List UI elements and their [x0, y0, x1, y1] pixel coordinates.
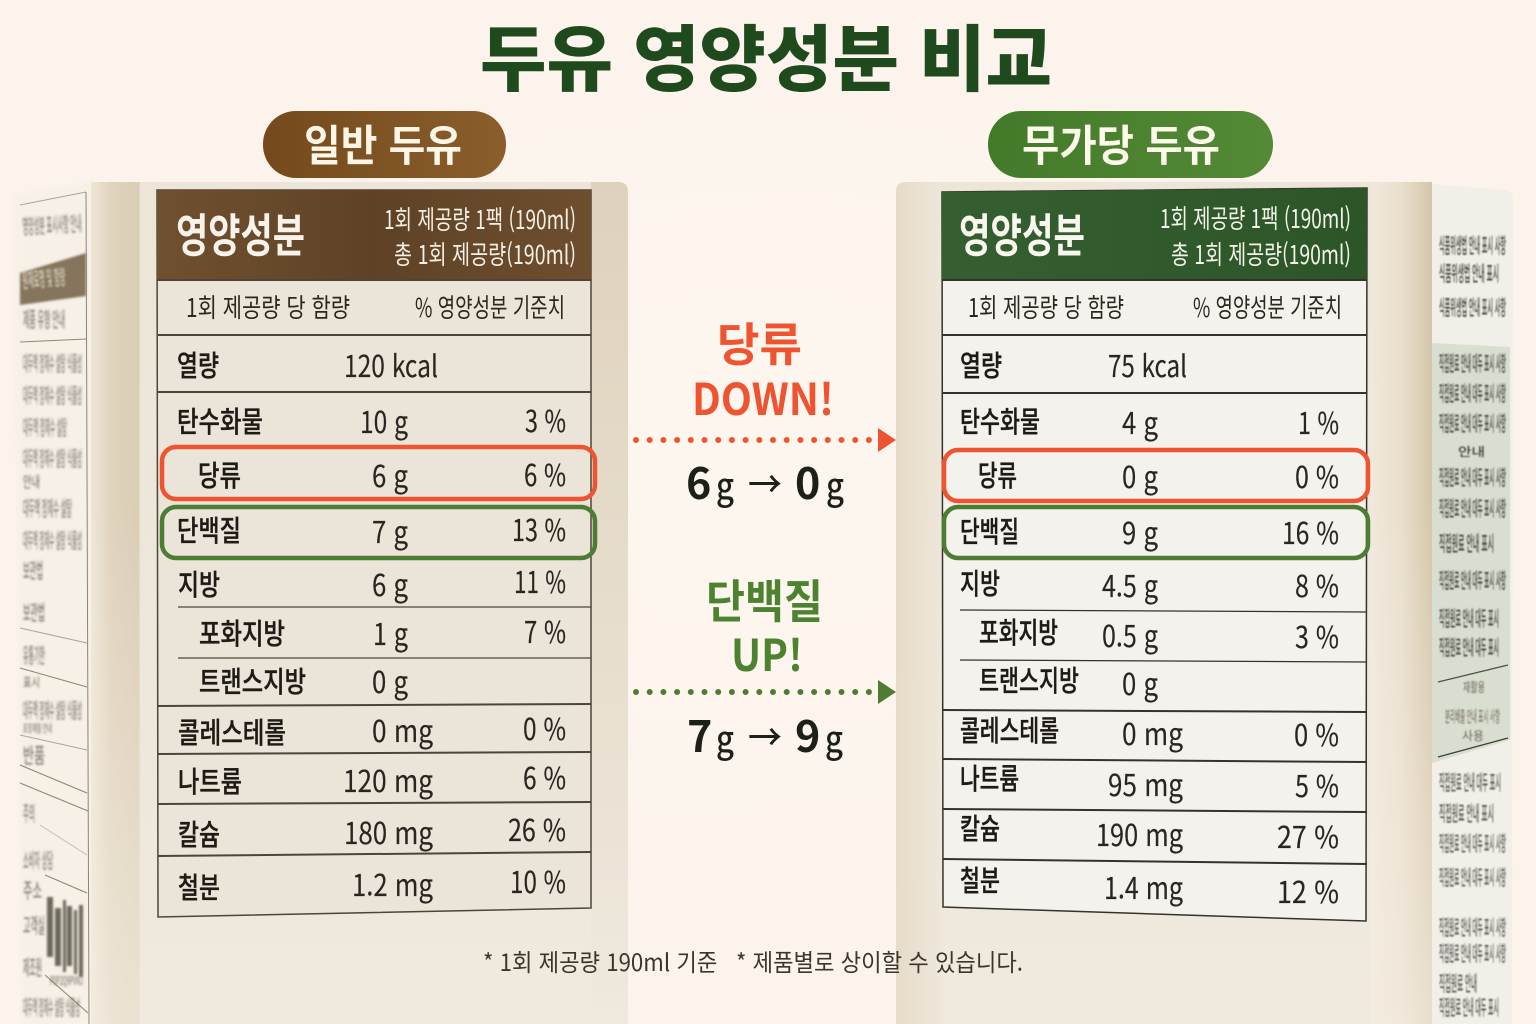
sugar change values: g — [716, 458, 734, 510]
protein change values: g — [716, 711, 734, 763]
row: calories: 열량 — [177, 343, 219, 385]
left carton side panel: 고객실 — [23, 910, 45, 940]
table column headings — [968, 288, 1342, 325]
row: saturated fat: 0.5 g — [1102, 612, 1158, 656]
row: cholesterol: 0 % — [523, 705, 566, 749]
title: 두유 영양성분 비교 — [480, 1, 1052, 106]
row: sodium: 120 mg — [343, 757, 433, 801]
protein change values: 7 — [687, 703, 712, 765]
table header — [942, 188, 1367, 280]
table column headings: 1회 제공량 당 함량 — [968, 288, 1124, 325]
table column headings — [186, 288, 565, 325]
panel: unsweetened soy milk nutrition table — [942, 188, 1368, 921]
row: carbohydrate: 10 g — [360, 398, 408, 442]
right carton side panel — [1432, 184, 1513, 1024]
row: fat — [960, 561, 1339, 606]
badge: unsweetened soy milk — [988, 111, 1273, 178]
row: carbohydrate: 탄수화물 — [177, 399, 263, 441]
row: saturated fat — [979, 610, 1339, 657]
row: carbohydrate — [960, 399, 1339, 443]
table header: 영양성분 — [959, 200, 1085, 266]
row: sugars: 6 g — [372, 452, 408, 496]
left carton side panel: 유통기한 — [23, 640, 45, 670]
row: iron: 12 % — [1277, 868, 1339, 912]
row: calories — [960, 342, 1187, 386]
row: cholesterol — [178, 705, 566, 752]
row: carbohydrate: 탄수화물 — [960, 399, 1040, 441]
left carton side panel: 소비자 상담 — [23, 845, 53, 875]
callout heading: 단백질 — [706, 566, 823, 632]
protein change values: g — [825, 711, 843, 763]
row: calcium — [178, 806, 566, 854]
sugar change values — [686, 450, 844, 512]
callout heading: UP! — [731, 620, 803, 684]
left milk carton: 대두액 정제수 설탕 식물성 — [23, 992, 80, 1022]
row: protein — [177, 506, 566, 552]
row: sodium: 95 mg — [1108, 761, 1183, 805]
callout heading — [692, 309, 834, 428]
row: carbohydrate: 4 g — [1122, 399, 1158, 443]
row: trans fat: 0 g — [372, 658, 408, 702]
row: protein: 13 % — [512, 506, 566, 550]
table header — [157, 190, 591, 280]
arrow: protein — [636, 680, 896, 704]
right carton side panel: 안내 — [1458, 443, 1485, 460]
row: iron: 1.4 mg — [1104, 864, 1183, 908]
left carton side panel — [14, 182, 92, 1024]
left carton side panel: 포장재질 안내 — [23, 720, 52, 736]
protein change values — [687, 703, 843, 765]
left carton side panel: P0P2Q9PVNJ — [50, 972, 83, 989]
callout: sugar down — [636, 309, 896, 512]
arrow: sugar — [636, 428, 896, 452]
highlight: protein row — [944, 507, 1368, 558]
left milk carton — [14, 182, 628, 1024]
row: sugars: 0 g — [1122, 453, 1158, 497]
left carton side panel: 제조원 — [23, 952, 42, 982]
icon: barcode — [47, 897, 83, 989]
table header: 1회 제공량 1팩 (190ml) — [384, 200, 576, 237]
row: calcium — [960, 806, 1339, 857]
left carton spine — [91, 182, 141, 1024]
footnote: * 1회 제공량 190ml 기준 * 제품별로 상이할 수 있습니다. — [483, 943, 1023, 978]
row: trans fat: 0 g — [1122, 660, 1158, 704]
row: saturated fat: 포화지방 — [199, 611, 285, 653]
badge: unsweetened soy milk: 무가당 두유 — [1022, 112, 1220, 174]
row: sodium: 5 % — [1295, 762, 1339, 806]
row: fat: 6 g — [372, 561, 408, 605]
table column headings: % 영양성분 기준치 — [1193, 288, 1342, 325]
row: sugars: 6 % — [524, 451, 566, 495]
row: trans fat — [979, 658, 1158, 704]
row: sodium: 나트륨 — [960, 756, 1019, 798]
row: sugars: 당류 — [198, 453, 241, 495]
row: fat: 지방 — [960, 561, 1000, 603]
row: carbohydrate: 3 % — [525, 397, 566, 441]
row: protein: 단백질 — [177, 508, 241, 550]
protein change values: → — [748, 709, 782, 761]
badge: regular soy milk: 일반 두유 — [304, 112, 462, 174]
left milk carton: 대두액 정제수 설탕 — [23, 493, 72, 523]
right milk carton — [896, 182, 1513, 1024]
left carton side panel: 제품 유형 안내 — [23, 304, 65, 334]
row: sodium — [960, 756, 1339, 806]
row: carbohydrate: 1 % — [1298, 399, 1339, 443]
table column headings: % 영양성분 기준치 — [415, 288, 565, 325]
row: protein: 16 % — [1282, 509, 1339, 553]
row: calcium: 칼슘 — [178, 812, 220, 854]
row: trans fat: 트랜스지방 — [199, 659, 306, 701]
row: cholesterol: 0 % — [1294, 711, 1339, 755]
row: calcium: 칼슘 — [960, 806, 1000, 848]
row: iron — [960, 858, 1339, 912]
table header: 1회 제공량 1팩 (190ml) — [1160, 199, 1351, 236]
row: sodium — [178, 754, 566, 801]
right carton spine — [1370, 182, 1432, 1024]
table header: 총 1회 제공량(190ml) — [394, 235, 576, 272]
callout heading: DOWN! — [692, 364, 834, 428]
left milk carton: 대두액 정제수 설탕 식물성 — [23, 695, 82, 725]
left milk carton: 원재료명 및 함량 — [21, 261, 66, 295]
left carton side panel: 안내 — [23, 471, 40, 492]
sugar change values: 6 — [686, 450, 711, 512]
row: saturated fat: 1 g — [373, 610, 408, 654]
row: fat: 지방 — [178, 562, 220, 604]
row: iron: 철분 — [960, 858, 1000, 900]
row: cholesterol: 0 mg — [1122, 710, 1183, 754]
panel: regular soy milk nutrition table — [157, 190, 595, 917]
right carton side panel: 사용 — [1462, 727, 1484, 744]
row: protein: 단백질 — [960, 509, 1019, 551]
left carton side panel: 표시 — [23, 672, 40, 691]
sugar change values: → — [748, 456, 782, 508]
row: cholesterol: 콜레스테롤 — [960, 708, 1059, 750]
sugar change values: 0 — [795, 450, 820, 512]
highlight: sugars row — [944, 450, 1368, 501]
row: trans fat: 트랜스지방 — [979, 658, 1079, 700]
left carton side panel: 보관법 — [23, 597, 45, 627]
right carton front — [896, 182, 1378, 1024]
table column headings: 1회 제공량 당 함량 — [186, 288, 350, 325]
row: cholesterol — [960, 708, 1339, 755]
row: iron: 1.2 mg — [352, 861, 433, 905]
row: sugars — [198, 451, 566, 496]
row: cholesterol: 0 mg — [372, 707, 433, 751]
row: protein: 9 g — [1122, 509, 1158, 553]
left carton side panel: 주의 — [23, 798, 35, 828]
row: calories: 120 kcal — [344, 342, 438, 386]
row: saturated fat — [199, 608, 566, 654]
highlight: protein row — [162, 507, 595, 558]
table header: 총 1회 제공량(190ml) — [1171, 235, 1351, 272]
right carton edge — [896, 182, 942, 1024]
row: calcium: 190 mg — [1096, 811, 1183, 855]
left carton front — [140, 182, 628, 1024]
row: saturated fat: 7 % — [524, 608, 566, 652]
row: saturated fat: 3 % — [1295, 613, 1339, 657]
row: fat: 8 % — [1295, 562, 1339, 606]
table header: 영양성분 — [176, 200, 305, 266]
row: sodium: 6 % — [523, 754, 566, 798]
row: sugars: 0 % — [1295, 453, 1339, 497]
row: calories — [177, 342, 438, 386]
left carton edge — [591, 182, 628, 1024]
row: sugars — [978, 453, 1339, 497]
left carton side panel: 반품 — [23, 740, 45, 770]
row: iron: 10 % — [510, 858, 566, 902]
left carton side panel: 주소 — [23, 875, 42, 905]
right carton side panel: 재활용 — [1463, 677, 1485, 696]
left milk carton: 대두액 정제수 설탕 — [23, 412, 67, 442]
badge: regular soy milk — [263, 111, 506, 178]
row: iron — [178, 858, 566, 907]
row: iron: 철분 — [178, 865, 220, 907]
row: sugars: 당류 — [978, 453, 1017, 495]
row: calories: 열량 — [960, 343, 1002, 385]
callout heading — [706, 566, 823, 684]
row: calcium: 27 % — [1277, 813, 1339, 857]
row: calcium: 26 % — [508, 806, 566, 850]
left milk carton: 대두액 정제수 설탕 식물성 — [23, 443, 82, 473]
callout heading: 당류 — [717, 309, 802, 375]
sugar change values: g — [826, 458, 844, 510]
row: sodium: 나트륨 — [178, 759, 242, 801]
row: fat — [178, 558, 566, 605]
row: fat: 11 % — [514, 558, 566, 602]
left milk carton: 대두액 정제수 설탕 식물성 — [23, 525, 82, 555]
callout: protein up — [636, 566, 896, 765]
left carton side panel: 보관법 — [23, 555, 43, 585]
left milk carton: 영양성분 표시사항 안내 — [22, 208, 82, 241]
row: protein — [960, 509, 1339, 553]
protein change values: 9 — [795, 703, 820, 765]
row: calcium: 180 mg — [344, 809, 433, 853]
left milk carton: 대두액 정제수 설탕 식물성 — [23, 380, 82, 410]
row: cholesterol: 콜레스테롤 — [178, 710, 286, 752]
row: carbohydrate — [177, 397, 566, 442]
left milk carton: 대두액 정제수 설탕 식물성 — [23, 348, 82, 378]
highlight: sugars row — [162, 447, 595, 499]
row: calories: 75 kcal — [1108, 342, 1187, 386]
row: saturated fat: 포화지방 — [979, 610, 1058, 652]
row: fat: 4.5 g — [1102, 562, 1158, 606]
row: trans fat — [199, 658, 408, 702]
row: protein: 7 g — [372, 508, 408, 552]
